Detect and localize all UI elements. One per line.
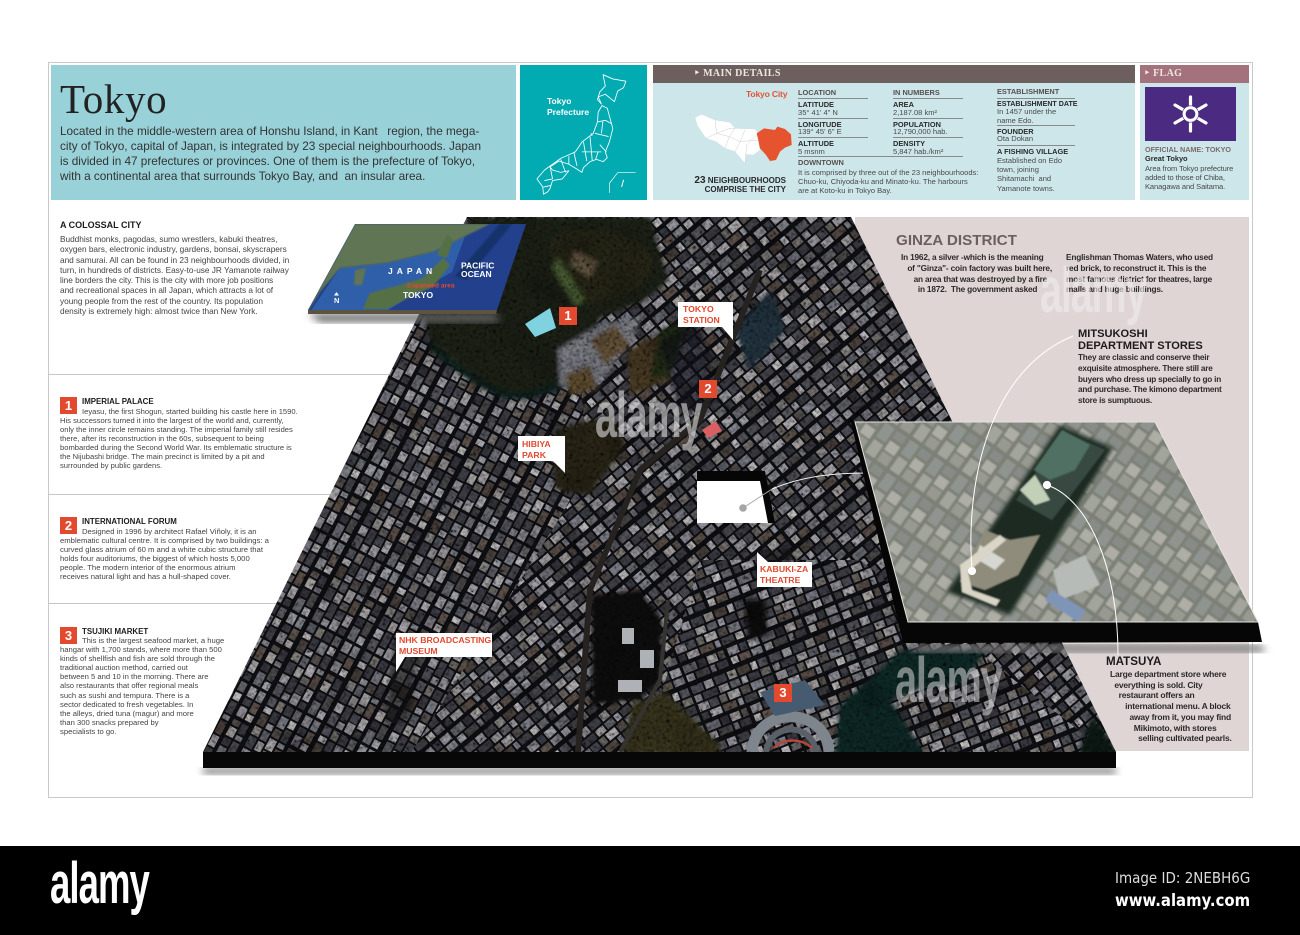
- imperial palace grounds: [420, 217, 668, 395]
- label: Expanded area: Expanded area: [407, 282, 455, 290]
- map marker 3: 3: [779, 685, 787, 700]
- text: Matsuya: Large department store where everything is sold. City restaurant offers an international menu. A block away from it, you may find Mikimoto, with stores selling cultivated pearls.: [1110, 669, 1232, 743]
- map marker 3: [774, 684, 792, 702]
- title: Tokyo: [60, 76, 167, 122]
- locator map: [300, 220, 530, 322]
- heading: Matsuya: MATSUYA: [1106, 655, 1161, 668]
- downtown text: [798, 156, 978, 195]
- column: in numbers: 2,187.08 km²: [893, 108, 937, 117]
- body: Tsujiki Market: This is the largest seafood market, a huge hangar with 1,700 stands, where more than 500 kinds of shellfish and fish are sold through the traditional auction method, carried out between 5 and 10 in the morning. There are also restaurants that offer regional meals such as sushi and tempura. There is a sector dedicated to fresh vegetables. In the alleys, dried tuna (magur) and more than 300 snacks prepared by specialists to go.: [60, 636, 224, 736]
- column: establishment: Established on Edo town, joining Shitamachi and Yamanote towns.: [997, 156, 1062, 193]
- column: location: LONGITUDE: [798, 120, 842, 129]
- callout lines with points: [968, 336, 1118, 655]
- body: International Forum: Designed in 1996 by architect Rafael Viñoly, it is an emblematic cultural centre. It is comprised by two buildings: a curved glass atrium of 60 m and a white cubic structure that holds four auditoriums, the biggest of which hosts 5,000 people. The modern interior of the enormous atrium receives natural light and has a hull-shaped cover.: [60, 526, 269, 581]
- footer logo: alamy: [50, 851, 149, 916]
- text block: A colossal city: [60, 220, 289, 316]
- column: location: [798, 88, 868, 156]
- watermark: alamy: [595, 379, 701, 451]
- downtown text: DOWNTOWN: [798, 158, 844, 167]
- column: establishment: In 1457 under the name Edo.: [997, 107, 1056, 125]
- flag caption: OFFICIAL NAME: TOKYO: [1145, 145, 1231, 154]
- satellite map of central Tokyo: [198, 217, 1268, 776]
- map marker 1: [559, 307, 577, 325]
- body: Imperial Palace: Ieyasu, the first Shogun, started building his castle here in 1590. His successors turned it into the largest of the world and, currently, only the inner circle remains standing. The imperial family still resides there, after its reconstruction in the 60s, subsequent to being bombarded during the Second World War. Its emblematic structure is the Nijubashi bridge. The main precinct is limited by a pit and surrounded by public gardens.: [60, 406, 298, 470]
- callout: Tokyo Station: [678, 302, 733, 340]
- caption: 23 neighbourhoods: 23 NEIGHBOURHOODS COMPRISE THE CITY: [694, 175, 786, 194]
- heading: Mitsukoshi: MITSUKOSHI DEPARTMENT STORES: [1078, 328, 1203, 352]
- main railway and expressway: [578, 270, 760, 752]
- heading: Ginza district: GINZA DISTRICT: [896, 232, 1017, 249]
- number 3: 3: [65, 628, 72, 643]
- panel: main details: [653, 65, 1135, 200]
- introduction text: Located in the middle-western area of Honshu Island, in Kant region, the mega- city of Tokyo, capital of Japan, is integrated by 23 special neighbourhoods. Japan is divided in 47 prefectures or provinces. One of them is the prefecture of Tokyo, with a continental area that surrounds Tokyo Bay, and an insular area.: [60, 124, 481, 183]
- column: in numbers: [893, 88, 963, 156]
- column: location: 139° 45' 6" E: [798, 127, 842, 136]
- column: in numbers: 12,790,000 hab.: [893, 127, 948, 136]
- cut-out expanded square: [697, 471, 868, 523]
- image id: Image ID: 2NEBH6G: [1115, 869, 1250, 887]
- callout: Hibiya Park: [518, 436, 565, 473]
- column: establishment: Ota Dokan: [997, 134, 1033, 143]
- footer band: [0, 846, 1300, 935]
- flag caption: Area from Tokyo prefecture added to those of Chiba, Kanagawa and Saitama.: [1145, 164, 1233, 191]
- text: Ginza first column: In 1962, a silver -which is the meaning of "Ginza"- coin factory was built here, an area that was destroyed by a fire in 1872. The government asked: [901, 252, 1052, 294]
- label: Tokyo City: Tokyo City: [746, 89, 787, 99]
- label: north arrow: N: [334, 296, 339, 305]
- flag caption: [1145, 145, 1233, 191]
- text block: Tsujiki Market: [60, 627, 224, 736]
- number 3: [60, 627, 77, 644]
- map marker 1: 1: [564, 308, 572, 323]
- heading: A colossal city: A COLOSSAL CITY: [60, 220, 142, 230]
- building shadows: [660, 320, 715, 420]
- number 1: [60, 397, 77, 414]
- page frame: [48, 62, 1253, 798]
- column: location: ALTITUDE: [798, 139, 834, 148]
- heading: Imperial Palace: IMPERIAL PALACE: [82, 397, 154, 406]
- Sumida river and bay: [835, 650, 985, 755]
- skyscrapers: [618, 628, 654, 692]
- heading: Tokyo Prefecture: Tokyo Prefecture: [547, 96, 589, 117]
- heading: Tsujiki Market: TSUJIKI MARKET: [82, 627, 148, 636]
- column: establishment: ESTABLISHMENT DATE: [997, 100, 1078, 108]
- label: Tokyo: TOKYO: [403, 290, 433, 300]
- map marker 2: 2: [704, 381, 712, 396]
- column: in numbers: 5,847 hab./km²: [893, 147, 943, 156]
- number 1: 1: [65, 398, 72, 413]
- header panel: title and introduction: [51, 65, 516, 200]
- column: location: 5 msnm: [798, 147, 825, 156]
- column: establishment: FOUNDER: [997, 126, 1034, 136]
- tokyo station railway: [735, 290, 785, 370]
- map extrusion and shadow: [203, 752, 1116, 774]
- column: in numbers: IN NUMBERS: [893, 88, 940, 97]
- column: establishment: [997, 87, 1078, 193]
- inset map: Ginza detail: [845, 415, 1265, 652]
- map: 23 neighbourhoods: [695, 114, 792, 164]
- text block: International Forum: [60, 517, 269, 581]
- callout text: Hibiya Park: HIBIYA PARK: [522, 439, 551, 460]
- city imagery: [203, 217, 1116, 752]
- flag caption: Great Tokyo: [1145, 154, 1188, 163]
- label: Pacific Ocean: OCEAN: [461, 269, 492, 279]
- callout: Kabuki-za Theatre: [757, 552, 812, 587]
- number 2: [60, 517, 77, 534]
- panel: flag: [1140, 65, 1249, 200]
- main details header bar: [653, 65, 1135, 83]
- watermark: alamy: [895, 644, 1001, 716]
- flag header bar: [1140, 65, 1249, 83]
- Hibiya park: [555, 415, 625, 495]
- flag header bar: ‣ FLAG: [1144, 68, 1182, 79]
- dark skyscraper district: [592, 590, 662, 705]
- panel: Japan locator map: [520, 65, 647, 200]
- map: Japan outline: [536, 74, 636, 195]
- callout text: Kabuki-za Theatre: KABUKI-ZA THEATRE: [760, 564, 808, 584]
- column: establishment: A FISHING VILLAGE: [997, 147, 1068, 156]
- watermark: alamy: [1040, 254, 1146, 326]
- callout: NHK Broadcasting Museum: [396, 633, 492, 672]
- column: location: LOCATION: [798, 88, 836, 97]
- column: in numbers: AREA: [893, 100, 914, 109]
- landscape regions: [385, 217, 1120, 755]
- grain over the city: [200, 215, 1120, 755]
- text: Mitsukoshi: They are classic and conserve their exquisite atmosphere. There still are buyers who dress up specially to go in and purchase. The kimono department store is sumptuous.: [1078, 353, 1222, 405]
- callout text: Tokyo Station: TOKYO STATION: [683, 304, 720, 324]
- Tsukiji market: [752, 680, 829, 752]
- body: A colossal city: Buddhist monks, pagodas, sumo wrestlers, kabuki theatres, oxygen bars, electronic industry, gardens, bonsai, skyscrapers and samurai. All can be found in 23 neighbourhoods divided, in turn, in hundreds of districts. Easy-to-use JR Yamanote railway line borders the city. This is the city with more job positions and recreational spaces in all Japan, which attracts a lot of young people from the rest of the country. Its population density is extremely high: almost twice than New York.: [60, 234, 289, 316]
- callout text: NHK Broadcasting Museum: NHK BROADCASTING MUSEUM: [399, 635, 491, 656]
- column: in numbers: DENSITY: [893, 139, 925, 148]
- label: Japan: JAPAN: [388, 266, 436, 276]
- text block: Imperial Palace: [60, 397, 298, 470]
- website: www.alamy.com: [1115, 891, 1250, 911]
- panel: Ginza background: [855, 217, 1249, 751]
- heading: main details: ‣ MAIN DETAILS: [694, 68, 781, 79]
- column: location: LATITUDE: [798, 100, 834, 109]
- map marker 2: [699, 380, 717, 398]
- column: in numbers: POPULATION: [893, 120, 941, 129]
- heading: International Forum: INTERNATIONAL FORUM: [82, 517, 177, 526]
- number 2: 2: [65, 518, 72, 533]
- text: Ginza second column: Englishman Thomas Waters, who used red brick, to reconstruct it. This is the most famous district for theatres, large malls and huge buildings.: [1066, 252, 1213, 294]
- label: Pacific Ocean: PACIFIC: [461, 260, 494, 270]
- column: establishment: ESTABLISHMENT: [997, 87, 1059, 96]
- downtown text: It is comprised by three out of the 23 neighbourhoods: Chuo-ku, Chiyoda-ku and Minato-ku. The harbours are at Koto-ku in Tokyo Bay.: [798, 168, 978, 195]
- column: location: 35° 41' 4" N: [798, 108, 838, 117]
- icon: Tokyo flag: [1145, 87, 1236, 141]
- dividers: [49, 374, 389, 375]
- Hama-rikyu gardens: [622, 692, 722, 754]
